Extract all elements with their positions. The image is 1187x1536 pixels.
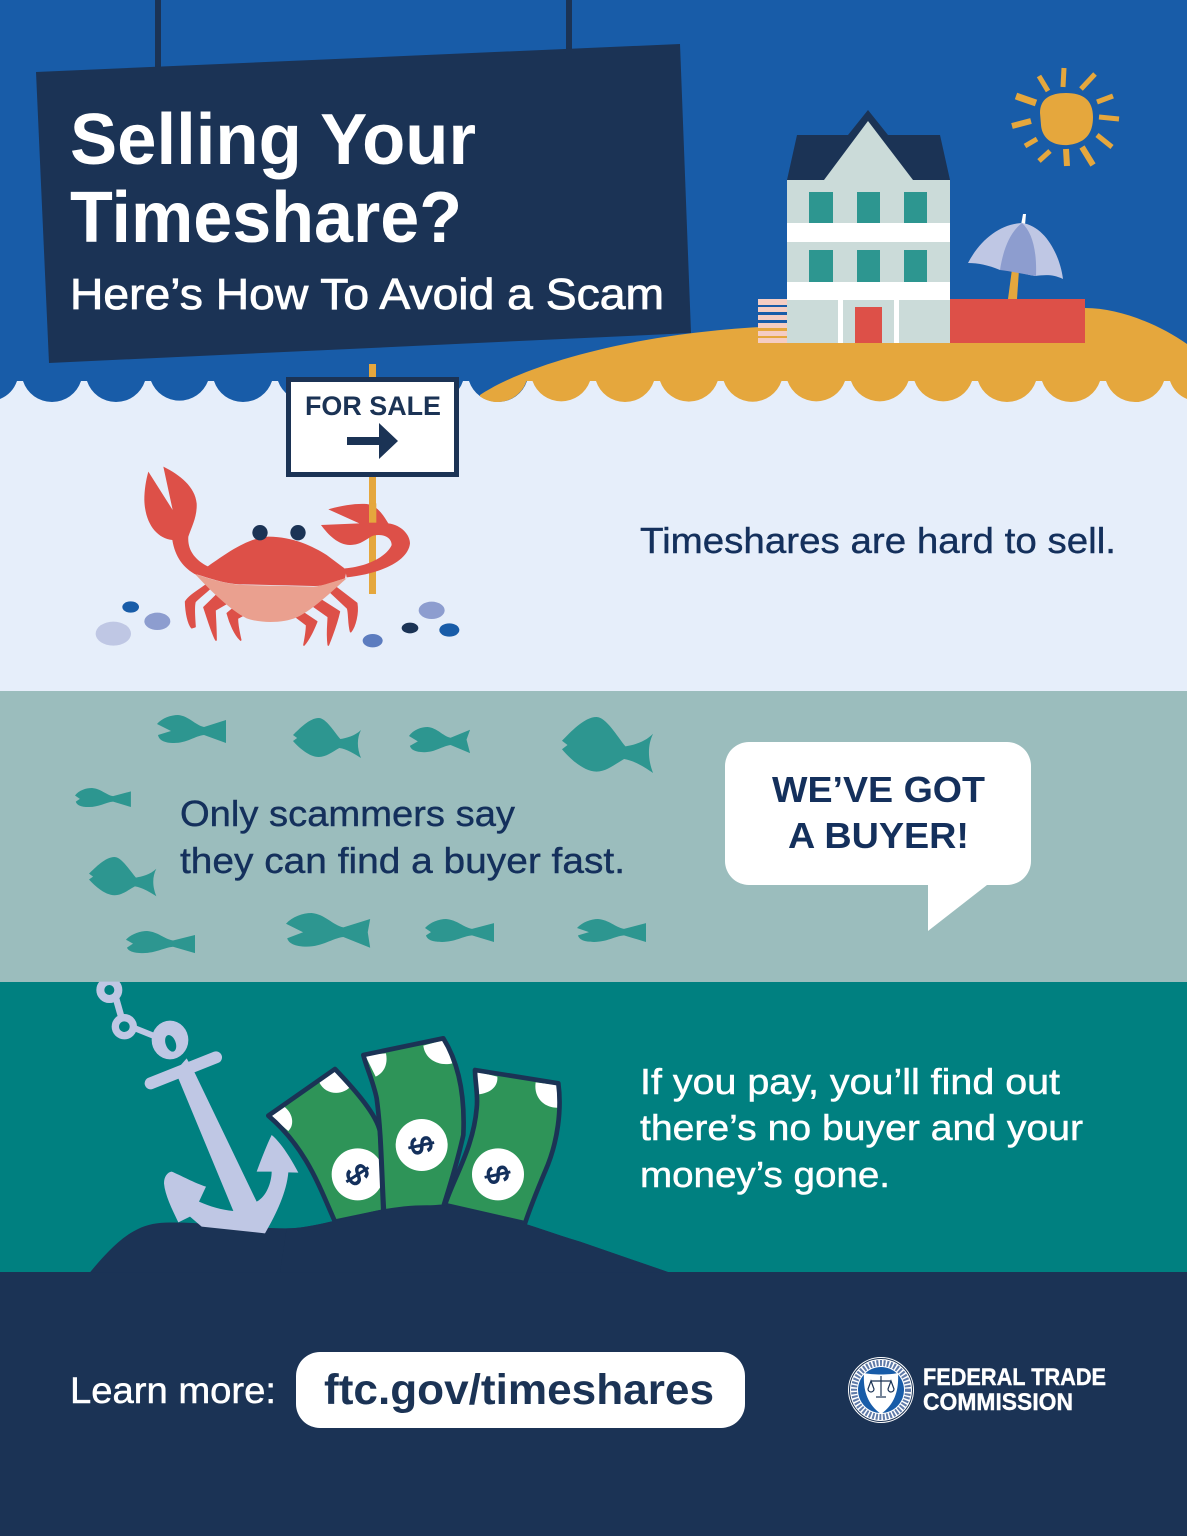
FTC wordmark: FEDERAL TRADE [923,1364,1106,1391]
icon: anchor and chain [100,981,298,1233]
panel: only scammers [0,691,1187,982]
icon: beach umbrella [968,214,1063,299]
title: Selling Your [70,100,476,180]
panel: header sky [0,0,1187,381]
icon: red beach wall [950,299,1085,343]
text: only scammers: Only scammers say [180,793,515,834]
seabed [90,1205,669,1272]
icon: sun [1012,68,1119,166]
speech bubble: WE’VE GOT [772,769,985,810]
panel: footer [0,1272,1187,1536]
icon: stairs [758,299,787,343]
text: money gone [640,1061,1083,1195]
text: only scammers: they can find a buyer fast. [180,840,625,881]
middle bill: $ [402,1133,440,1157]
icon: FTC seal [848,1357,914,1423]
FTC wordmark: COMMISSION [923,1389,1073,1416]
title line 2: Timeshare? [70,178,462,258]
speech bubble [725,742,1031,931]
sign arrow [347,423,398,459]
subtitle: Here’s How To Avoid a Scam [70,270,664,319]
right bill: $ [479,1162,516,1187]
learn more label: Learn more: [70,1370,276,1411]
speech bubble: A BUYER! [788,815,969,856]
text: money gone: there’s no buyer and your [640,1107,1083,1148]
sign text: FOR SALE [305,391,441,421]
url pill: ftc.gov/timeshares [324,1366,714,1414]
text: money gone: If you pay, you’ll find out [640,1061,1060,1102]
icon: dollar bills [268,1038,560,1223]
for sale sign [288,380,456,474]
left bill: $ [338,1158,377,1191]
title sign with hanging posts [36,0,691,363]
text: only scammers [180,793,625,881]
text: money gone: money’s gone. [640,1154,890,1195]
icon: crab holding sign [144,467,410,645]
panel: money gone [0,982,1187,1272]
middle bill [363,1038,464,1212]
right bill [445,1070,560,1223]
left bill [268,1069,384,1222]
rocks [96,601,459,647]
blue wave scallops [0,375,527,402]
seabed front mound [280,1205,669,1272]
text: hard to sell: Timeshares are hard to sell. [640,520,1116,561]
panel: timeshares are hard to sell [0,381,1187,691]
url pill [296,1352,745,1428]
school of fish [75,715,653,953]
FTC wordmark [923,1364,1106,1416]
island sand [480,308,1187,402]
icon: beach house [787,110,950,343]
for sale post [369,364,376,594]
